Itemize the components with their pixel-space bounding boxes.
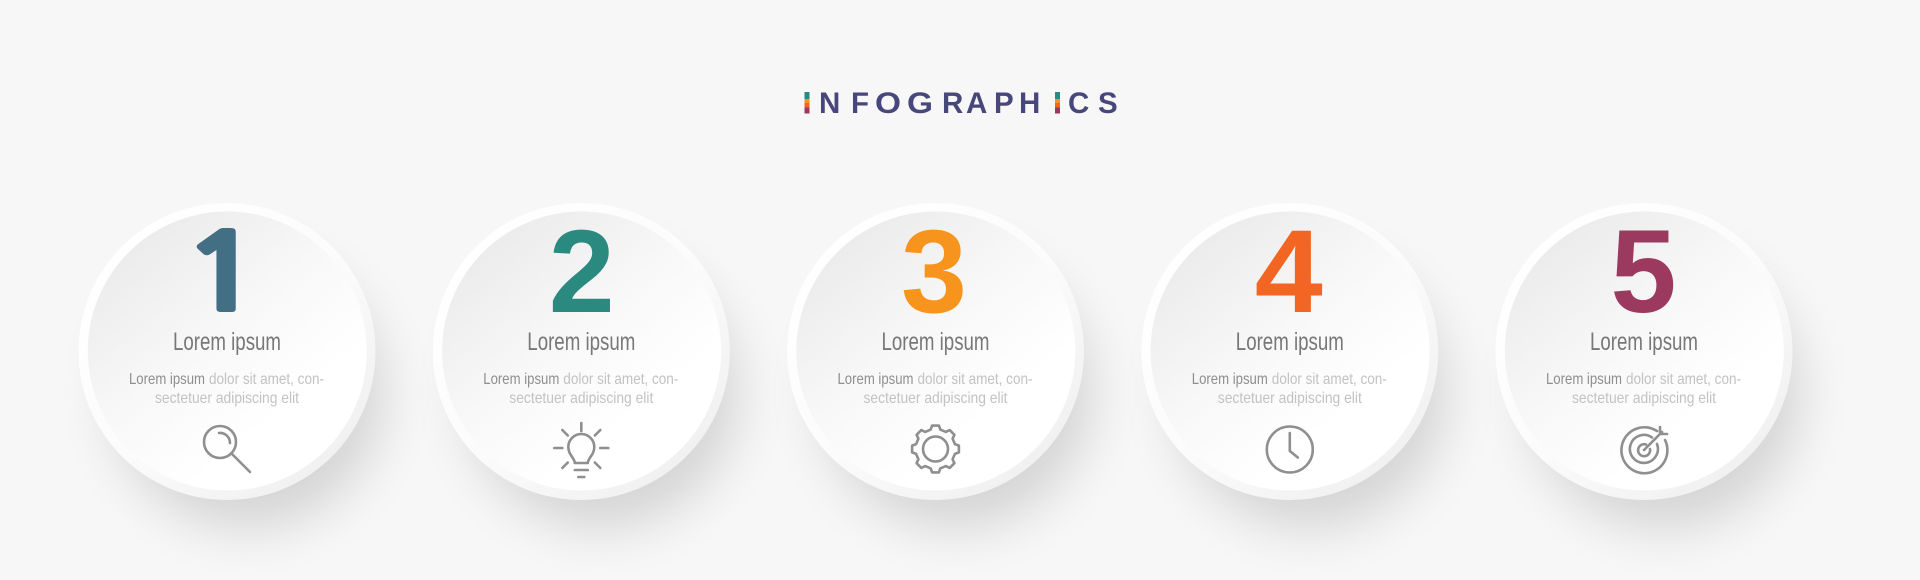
heading: Lorem ipsum — [173, 328, 281, 356]
description: dolor sit amet, con- — [918, 371, 1032, 388]
heading: Lorem ipsum — [1590, 328, 1698, 356]
description: dolor sit amet, con- — [1272, 371, 1387, 388]
title: F — [851, 87, 869, 120]
panel: step 3 — [787, 203, 1090, 526]
panel: step 1 — [78, 203, 381, 526]
heading: Lorem ipsum — [1236, 328, 1344, 356]
description — [1546, 371, 1741, 407]
number 2: 2 — [549, 206, 615, 338]
description: Lorem ipsum — [1192, 371, 1268, 388]
title: C — [1068, 87, 1089, 120]
icon: magnifier — [204, 426, 250, 472]
description: sectetuer adipiscing elit — [1218, 390, 1362, 407]
description: dolor sit amet, con- — [563, 371, 678, 388]
description: Lorem ipsum — [483, 371, 559, 388]
description — [838, 371, 1032, 407]
number 4: 4 — [1255, 206, 1323, 338]
heading: Lorem ipsum — [527, 328, 635, 356]
panel: step 2 — [433, 203, 735, 526]
description — [129, 371, 324, 407]
panel: step 5 — [1496, 203, 1798, 526]
title: R — [942, 87, 963, 120]
description — [1192, 371, 1387, 407]
description: Lorem ipsum — [1546, 371, 1622, 388]
title: G — [907, 87, 933, 120]
number 5: 5 — [1610, 206, 1676, 338]
description: sectetuer adipiscing elit — [864, 390, 1008, 407]
number 3: 3 — [901, 206, 967, 338]
title: A — [966, 87, 987, 120]
icon: gear — [912, 426, 959, 472]
description: Lorem ipsum — [838, 371, 914, 388]
description: sectetuer adipiscing elit — [1572, 390, 1716, 407]
icon: clock — [1267, 426, 1313, 472]
number 1: 1 — [181, 222, 265, 326]
title: S — [1098, 87, 1118, 120]
heading: Lorem ipsum — [882, 328, 990, 356]
description: Lorem ipsum — [129, 371, 205, 388]
title: N — [819, 87, 840, 120]
panel: step 4 — [1141, 203, 1444, 526]
description: sectetuer adipiscing elit — [155, 390, 299, 407]
description: dolor sit amet, con- — [1626, 371, 1741, 388]
title: H — [1019, 87, 1040, 120]
icon: target — [1621, 427, 1667, 473]
description — [483, 371, 678, 407]
title — [804, 87, 1118, 120]
title: O — [875, 87, 901, 120]
description: sectetuer adipiscing elit — [509, 390, 654, 407]
icon: light bulb — [554, 423, 608, 477]
description: dolor sit amet, con- — [209, 371, 324, 388]
title: P — [994, 87, 1014, 120]
